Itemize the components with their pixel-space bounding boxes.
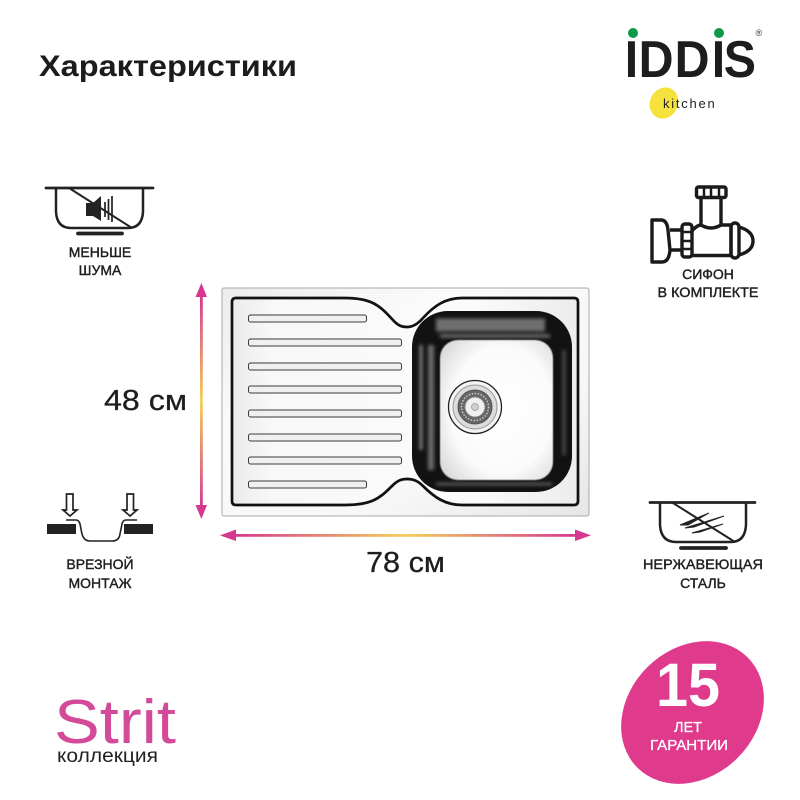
collection title: Strit: [54, 688, 176, 757]
speaker: [86, 196, 101, 221]
collection name: [54, 688, 176, 767]
bowl wall highlights: [421, 325, 564, 484]
siphon right cap: [731, 223, 739, 258]
drain basket: [458, 390, 492, 424]
strike line: [69, 188, 132, 228]
siphon body: [692, 225, 731, 256]
label: siphon included: [658, 266, 758, 300]
sink plate: [222, 288, 589, 516]
warranty badge: [592, 612, 793, 800]
label: less noise: МЕНЬШЕ: [69, 244, 131, 260]
badge number: 15: [656, 651, 720, 719]
height label: 48 см: [104, 385, 187, 417]
registered mark: ®: [756, 28, 763, 38]
left countertop: [47, 524, 76, 534]
collection caption: коллекция: [57, 746, 158, 767]
right countertop: [124, 524, 153, 534]
logo green dots: [628, 28, 724, 38]
drain flange: [453, 385, 497, 429]
sound waves: [105, 196, 112, 222]
sink base: [78, 232, 122, 235]
label: flush mount: [66, 555, 134, 591]
kitchen word: kitchen: [663, 96, 716, 111]
sink profile: [66, 520, 137, 541]
logo wordmark: IDDIS: [625, 30, 756, 88]
yellow blob: [645, 83, 683, 123]
label: less noise: ШУМА: [79, 262, 122, 278]
width label: 78 см: [366, 547, 445, 579]
label: less noise: [69, 244, 131, 278]
sink photo: [222, 288, 589, 516]
icon: stainless steel: [650, 502, 755, 548]
siphon riser: [701, 198, 721, 228]
warranty badge: ГАРАНТИИ: [650, 738, 728, 754]
title: Характеристики: [39, 50, 297, 83]
steel strike line: [673, 503, 735, 542]
drain plug: [465, 397, 485, 417]
bowl floor: [440, 340, 553, 480]
steel sink rim: [650, 501, 755, 504]
label: flush mount: ВРЕЗНОЙ: [66, 555, 134, 572]
width arrow: [220, 530, 591, 541]
right down arrow: [123, 494, 137, 516]
label: siphon included: СИФОН: [682, 266, 734, 282]
sink rim: [46, 187, 153, 189]
label: flush mount: МОНТАЖ: [68, 575, 132, 591]
icon: flush mount: [47, 494, 153, 541]
badge blob: [592, 612, 793, 800]
steel sink bowl: [660, 503, 746, 542]
siphon left cap: [652, 220, 670, 262]
sink bowl: [56, 188, 143, 228]
logo: IDDIS kitchen: [625, 28, 763, 123]
drain: [448, 380, 502, 434]
steel sink base: [681, 546, 726, 550]
siphon top nut: [696, 187, 726, 198]
label: stainless steel: [643, 556, 763, 591]
shine marks: [680, 513, 724, 533]
icon: siphon: [652, 187, 753, 262]
left down arrow: [63, 494, 77, 516]
drain outer ring: [448, 380, 502, 434]
bowl wall: [412, 311, 572, 492]
drainboard slots: [248, 315, 402, 488]
siphon left pipe: [670, 230, 682, 250]
label: siphon included: В КОМПЛЕКТЕ: [658, 284, 758, 300]
sink recessed outline: [232, 298, 578, 505]
label: stainless steel: НЕРЖАВЕЮЩАЯ: [643, 556, 763, 572]
height arrow: [196, 283, 207, 519]
badge label: ЛЕТ: [674, 720, 702, 736]
siphon left nut: [682, 224, 692, 257]
label: stainless steel: СТАЛЬ: [680, 575, 726, 591]
icon: less noise: [46, 188, 153, 234]
